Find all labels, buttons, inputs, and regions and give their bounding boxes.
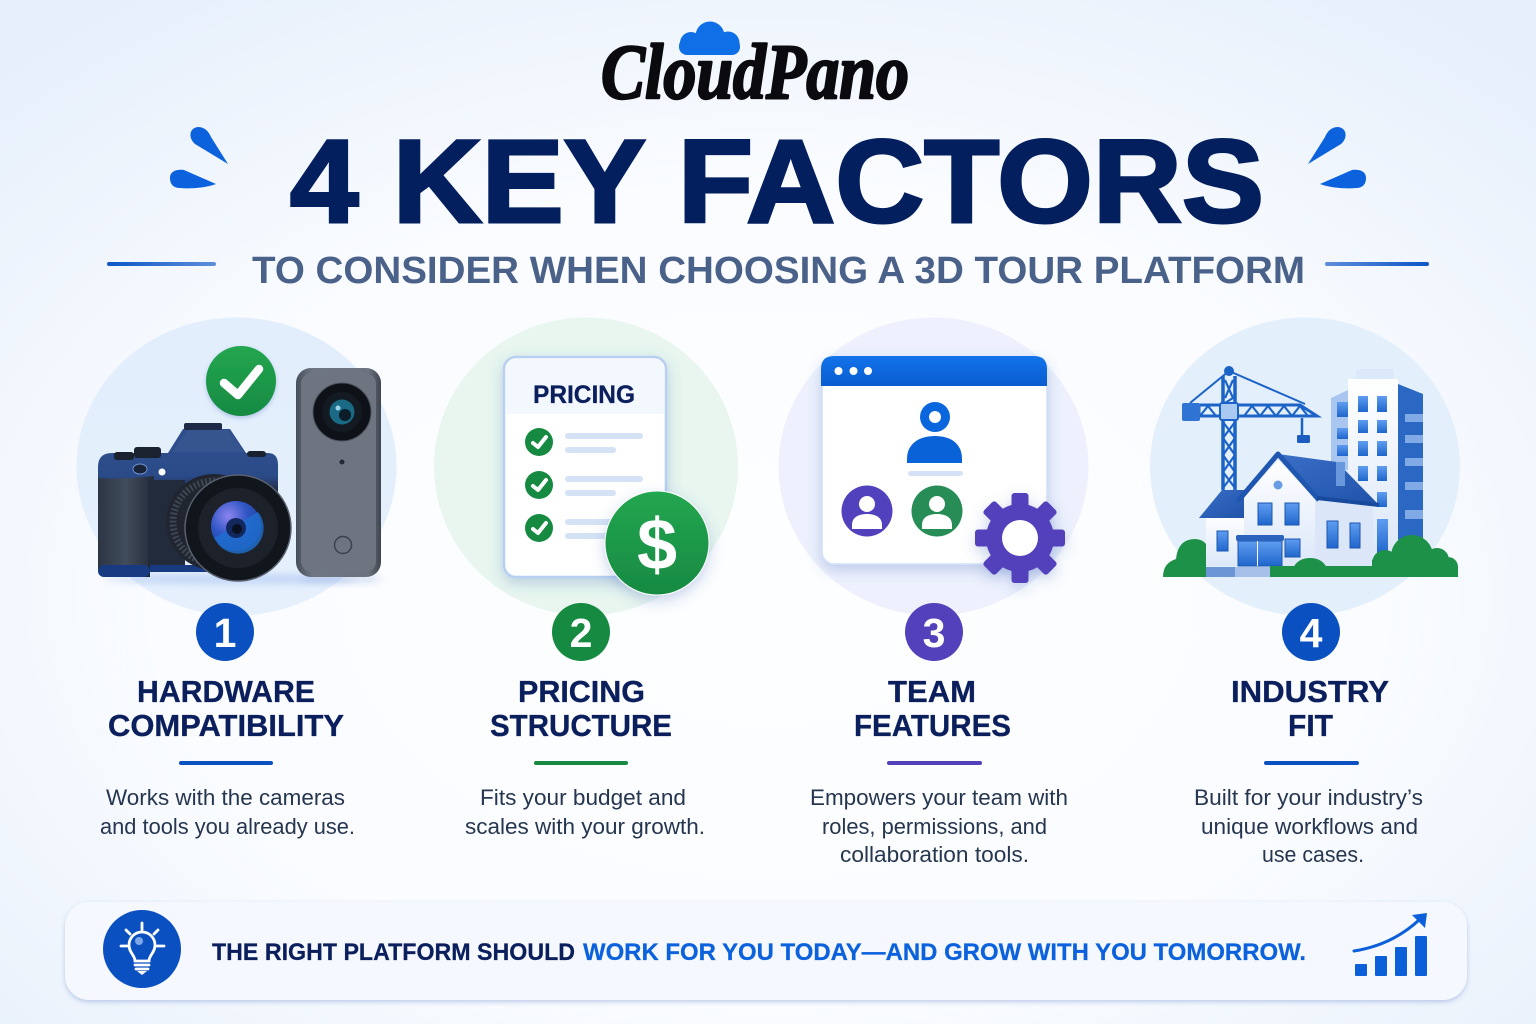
description: Works with the cameras <box>106 785 345 810</box>
heading: TEAM <box>888 674 976 709</box>
icon: app window <box>821 356 1047 564</box>
number badge 2 <box>552 603 610 661</box>
icon: house <box>1193 454 1379 577</box>
description: Fits your budget and <box>480 785 686 810</box>
callout bar <box>65 902 1467 1000</box>
icon: green user <box>912 486 962 536</box>
illustration backdrop <box>778 318 1088 616</box>
number badge 2: 2 <box>570 610 592 656</box>
subtitle text: TO CONSIDER WHEN CHOOSING A 3D TOUR PLATFORM <box>252 250 1305 292</box>
heading: HARDWARE <box>137 674 315 709</box>
panel: pricing structure <box>434 318 738 839</box>
icon: dollar coin <box>605 491 709 595</box>
heading: PRICING <box>518 674 645 709</box>
logo: CloudPano <box>601 22 909 115</box>
icon: apartment tower <box>1331 369 1423 554</box>
icon: purple user <box>842 486 892 536</box>
number badge 1 <box>196 603 254 661</box>
description <box>465 785 705 839</box>
panel: hardware compatibility <box>76 318 396 839</box>
description <box>810 785 1068 867</box>
heading <box>108 674 344 743</box>
heading: INDUSTRY <box>1231 674 1389 709</box>
description: use cases. <box>1262 842 1364 867</box>
icon: tower crane <box>1182 366 1317 490</box>
illustration backdrop <box>76 318 396 616</box>
description: Empowers your team with <box>810 785 1068 810</box>
icon: growth chart <box>1354 913 1427 976</box>
icon: light bulb <box>103 910 181 988</box>
icon: DSLR camera <box>98 423 355 583</box>
icon: lead user <box>907 402 963 476</box>
icon: pricing sheet <box>504 357 666 577</box>
title: 4 KEY FACTORS <box>290 116 1264 248</box>
subtitle with side rules <box>107 250 1429 292</box>
number badge 4 <box>1282 603 1340 661</box>
icon: shrubs <box>1163 535 1458 577</box>
heading: FIT <box>1288 708 1333 743</box>
heading <box>490 674 672 743</box>
sheet heading: PRICING <box>533 381 635 409</box>
heading: COMPATIBILITY <box>108 708 344 743</box>
description <box>1194 785 1423 867</box>
number badge 3 <box>905 603 963 661</box>
callout highlight: WORK FOR YOU TODAY—AND GROW WITH YOU TOMORROW. <box>583 939 1306 966</box>
description: and tools you already use. <box>100 814 355 839</box>
description: collaboration tools. <box>840 842 1029 867</box>
heading: FEATURES <box>854 708 1011 743</box>
description: roles, permissions, and <box>822 814 1047 839</box>
heading <box>854 674 1011 743</box>
number badge 4: 4 <box>1300 610 1323 656</box>
callout text: THE RIGHT PLATFORM SHOULD <box>212 939 575 966</box>
icon: cloud <box>679 22 740 55</box>
heading <box>1231 674 1389 743</box>
decorative sparks left <box>170 127 228 188</box>
icon: dollar coin: $ <box>637 505 677 585</box>
logo wordmark: CloudPano <box>601 28 909 115</box>
number badge 3: 3 <box>923 610 945 656</box>
illustration backdrop <box>434 318 738 616</box>
description: Built for your industry’s <box>1194 785 1423 810</box>
icon: green check badge <box>206 346 276 416</box>
icon: 360 action camera <box>296 368 382 582</box>
panel: team features <box>778 318 1088 867</box>
number badge 1: 1 <box>214 610 236 656</box>
icon: gear <box>975 493 1065 583</box>
description: unique workflows and <box>1201 814 1418 839</box>
decorative sparks right <box>1308 127 1366 188</box>
illustration backdrop <box>1150 318 1460 616</box>
heading: STRUCTURE <box>490 708 672 743</box>
description: scales with your growth. <box>465 814 705 839</box>
description <box>100 785 355 839</box>
panel: industry fit <box>1150 318 1460 867</box>
